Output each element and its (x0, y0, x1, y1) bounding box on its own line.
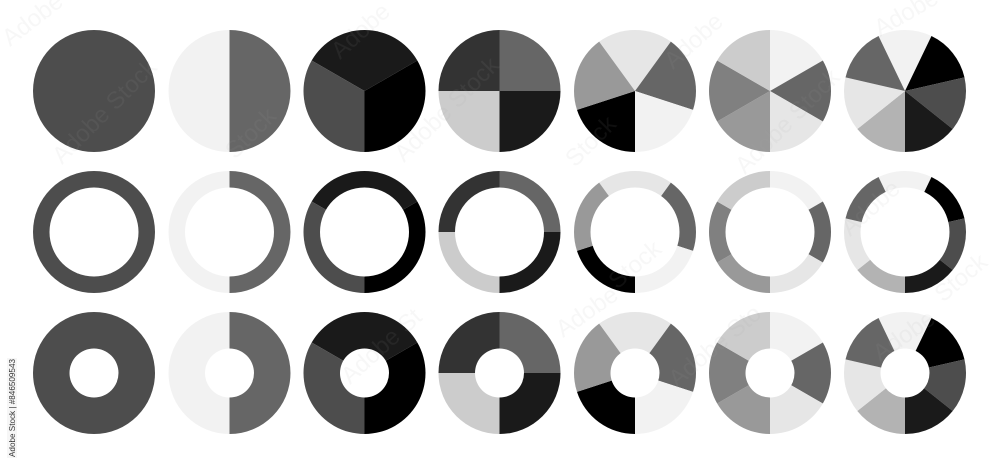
ring: 6 segments (709, 171, 831, 293)
ring: 4 segments (438, 171, 560, 293)
donut: 5 segments (574, 312, 696, 434)
ring: 2 segments (169, 171, 290, 293)
faint stock watermarks: Adobe (836, 175, 906, 241)
thin ring row: 1 to 7 segments (33, 171, 966, 293)
donut: 6 segments (709, 312, 831, 434)
pie: 1 segment (33, 30, 155, 152)
pie: 5 segments (574, 30, 696, 152)
faint stock watermarks: Stock (930, 248, 994, 308)
pie row: 1 to 7 segments (33, 30, 966, 152)
donut: 1 segment (33, 312, 155, 434)
vertical stock id caption: Adobe Stock | #846509543 (8, 359, 17, 457)
donut: 3 segments (303, 312, 426, 434)
faint stock watermarks: Stock (560, 110, 622, 172)
faint stock watermarks: Adobe (868, 305, 940, 367)
faint stock watermarks: Adobe Sto (664, 300, 767, 393)
donut: 4 segments (438, 312, 560, 434)
ring: 7 segments (844, 171, 966, 293)
faint stock watermarks: Adobe (551, 281, 623, 343)
donut: 7 segments (844, 312, 966, 434)
faint stock watermarks: Stock (604, 235, 668, 295)
pie: 2 segments (169, 30, 290, 152)
pie: 7 segments (844, 30, 966, 152)
ring: 3 segments (303, 171, 426, 293)
faint stock watermarks: Adobe Stock (47, 53, 163, 169)
faint stock watermarks: Adobe Stock (730, 63, 846, 179)
ring: 1 segment (33, 171, 155, 293)
thick donut row: 1 to 7 segments (33, 312, 966, 434)
donut: 2 segments (169, 312, 290, 434)
faint stock watermarks: Adobe St (336, 303, 428, 389)
pie: 6 segments (709, 30, 831, 152)
faint stock watermarks: Adobe (659, 8, 729, 74)
pie: 3 segments (303, 30, 426, 152)
faint stock watermarks: Stock (220, 102, 282, 164)
pie: 4 segments (438, 30, 560, 152)
faint stock watermarks: Adobe Stock (389, 51, 505, 167)
ring: 5 segments (574, 171, 696, 293)
